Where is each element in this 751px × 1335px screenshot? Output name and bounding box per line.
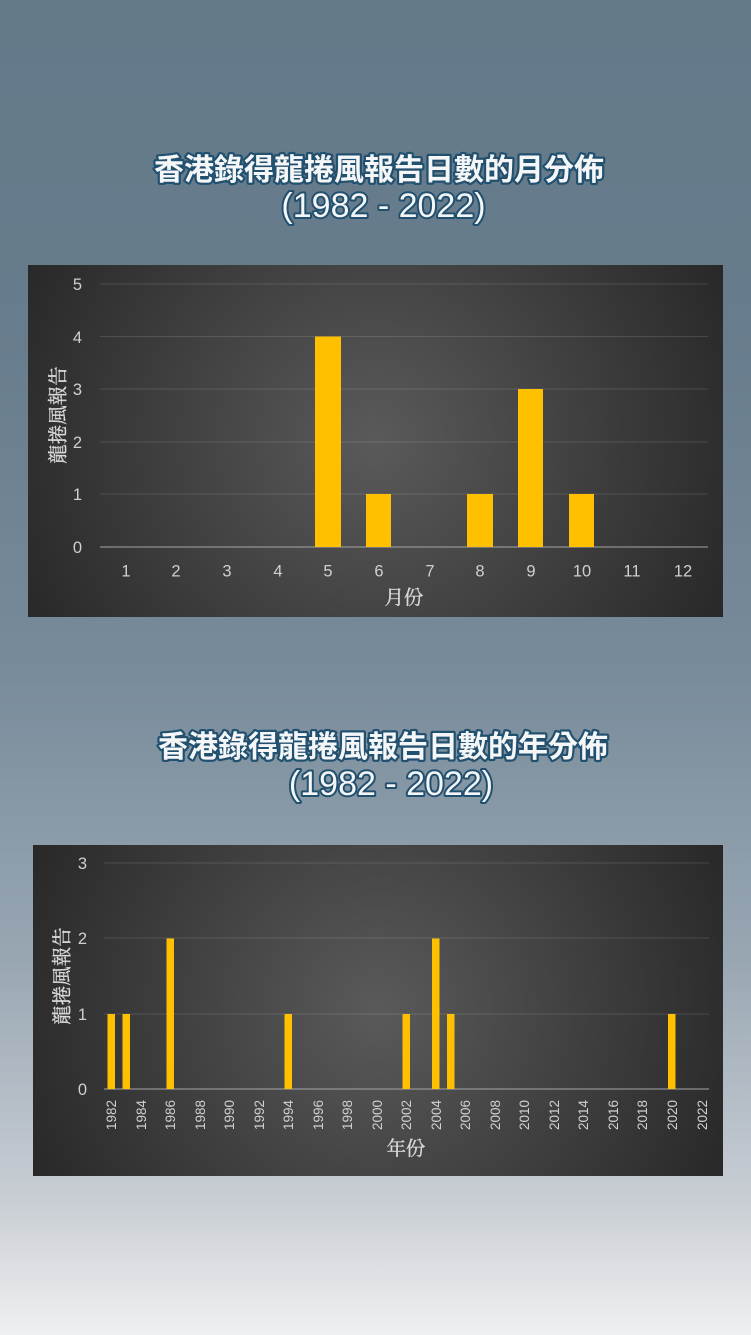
bars bbox=[108, 938, 676, 1089]
x axis ticks: 9 bbox=[526, 562, 536, 580]
x axis ticks: 8 bbox=[475, 562, 485, 580]
y axis ticks bbox=[78, 855, 87, 1099]
y axis ticks: 2 bbox=[78, 930, 87, 948]
x axis ticks: 1998 bbox=[340, 1100, 355, 1130]
gridlines and axis bbox=[100, 284, 708, 547]
y axis ticks: 0 bbox=[73, 539, 82, 557]
x axis ticks bbox=[104, 1100, 710, 1130]
y axis ticks: 1 bbox=[78, 1006, 87, 1024]
gridlines and axis bbox=[104, 863, 709, 1089]
panel: yearly bar chart bbox=[33, 845, 723, 1176]
y axis ticks: 1 bbox=[73, 486, 82, 504]
y axis ticks: 5 bbox=[73, 276, 82, 294]
y axis ticks: 3 bbox=[78, 855, 87, 873]
x axis title: 月份 bbox=[384, 587, 424, 609]
x axis ticks: 2006 bbox=[458, 1100, 473, 1130]
title: yearly distribution: 香港錄得龍捲風報告日數的年分佈 bbox=[158, 722, 608, 766]
x axis ticks: 1994 bbox=[281, 1100, 296, 1130]
title: monthly distribution: 香港錄得龍捲風報告日數的月分佈 bbox=[154, 145, 604, 189]
x axis ticks: 1992 bbox=[252, 1100, 267, 1130]
title: yearly distribution bbox=[158, 722, 608, 803]
x axis ticks: 2004 bbox=[429, 1100, 444, 1130]
x axis ticks: 6 bbox=[374, 562, 384, 580]
y axis title: 龍捲風報告 bbox=[46, 366, 70, 464]
x axis ticks: 10 bbox=[573, 562, 591, 580]
x axis ticks: 1984 bbox=[134, 1100, 149, 1130]
x axis ticks: 1990 bbox=[222, 1100, 237, 1130]
x axis ticks: 7 bbox=[425, 562, 435, 580]
x axis ticks: 3 bbox=[222, 562, 232, 580]
y axis ticks: 0 bbox=[78, 1081, 87, 1099]
panel: monthly bar chart bbox=[28, 265, 723, 617]
x axis ticks: 2020 bbox=[665, 1100, 680, 1130]
x axis ticks: 2016 bbox=[606, 1100, 621, 1130]
x axis title: 年份 bbox=[386, 1138, 426, 1160]
x axis ticks: 2022 bbox=[695, 1100, 710, 1130]
x axis ticks: 2014 bbox=[576, 1100, 591, 1130]
x axis ticks: 2008 bbox=[488, 1100, 503, 1130]
y axis title: 龍捲風報告 bbox=[50, 927, 74, 1025]
x axis ticks: 4 bbox=[273, 562, 283, 580]
x axis ticks: 11 bbox=[623, 562, 641, 580]
x axis ticks: 1986 bbox=[163, 1100, 178, 1130]
x axis ticks: 1996 bbox=[311, 1100, 326, 1130]
x axis ticks: 2012 bbox=[547, 1100, 562, 1130]
x axis ticks: 2002 bbox=[399, 1100, 414, 1130]
x axis ticks: 5 bbox=[323, 562, 333, 580]
x axis ticks bbox=[121, 562, 692, 580]
y axis ticks: 4 bbox=[73, 329, 82, 347]
title: monthly distribution bbox=[154, 145, 604, 225]
y axis ticks bbox=[73, 276, 82, 557]
title: monthly distribution: (1982 - 2022) bbox=[281, 187, 486, 225]
y axis ticks: 2 bbox=[73, 434, 82, 452]
x axis ticks: 1 bbox=[121, 562, 131, 580]
x axis ticks: 1982 bbox=[104, 1100, 119, 1130]
x axis ticks: 2010 bbox=[517, 1100, 532, 1130]
bars bbox=[315, 336, 594, 547]
y axis ticks: 3 bbox=[73, 381, 82, 399]
x axis ticks: 1988 bbox=[193, 1100, 208, 1130]
x axis ticks: 2 bbox=[171, 562, 181, 580]
x axis ticks: 2000 bbox=[370, 1100, 385, 1130]
title: yearly distribution: (1982 - 2022) bbox=[289, 765, 493, 803]
x axis ticks: 2018 bbox=[635, 1100, 650, 1130]
x axis ticks: 12 bbox=[674, 562, 692, 580]
